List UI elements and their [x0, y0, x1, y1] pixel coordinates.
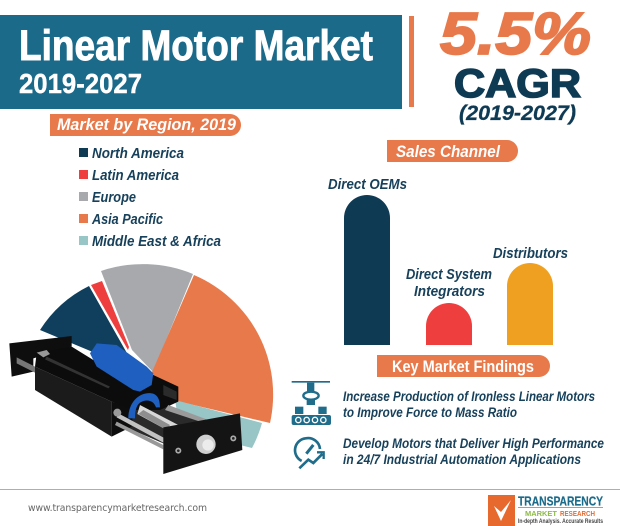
bar labels: Integrators: [414, 284, 485, 300]
logo: [488, 494, 604, 526]
bar: distributors: [507, 263, 553, 345]
legend: North America: [92, 145, 184, 162]
legend: Europe: [92, 189, 136, 206]
icon: performance gauge: [295, 438, 324, 468]
bar labels: Direct System: [406, 267, 492, 283]
title: Linear Motor Market: [19, 22, 373, 70]
icon: robotic arm and conveyor: [292, 381, 331, 425]
website url: www.transparencymarketresearch.com: [28, 503, 207, 514]
CAGR callout: (2019-2027): [459, 102, 576, 125]
logo: RESEARCH: [560, 509, 595, 518]
findings text: [343, 389, 604, 467]
bar: direct system integrators: [426, 303, 472, 345]
logo: In-depth Analysis. Accurate Results: [518, 519, 604, 525]
bar: direct OEMs: [344, 195, 390, 345]
CAGR callout: CAGR: [454, 62, 581, 106]
pie chart: [40, 264, 273, 448]
legend: Asia Pacific: [91, 211, 164, 228]
CAGR callout: 5.5%: [440, 1, 591, 67]
title banner: [0, 15, 402, 109]
findings text: in 24/7 Industrial Automation Applications: [343, 452, 581, 467]
CAGR callout: [440, 1, 591, 125]
linear motor product image: [9, 336, 242, 474]
legend: Latin America: [92, 167, 179, 184]
bar labels: Direct OEMs: [328, 177, 407, 193]
legend: [79, 145, 221, 250]
bar chart: sales channel: [344, 195, 553, 345]
findings text: to Improve Force to Mass Ratio: [343, 405, 517, 420]
accent bar: [409, 16, 414, 107]
heading: market by region: Market by Region, 2019: [57, 116, 237, 134]
legend: Middle East & Africa: [92, 233, 221, 250]
footer divider: [0, 489, 620, 490]
heading: sales channel: Sales Channel: [396, 143, 500, 161]
subtitle years: 2019-2027: [19, 68, 142, 99]
bar labels: Distributors: [493, 246, 568, 262]
logo: MARKET: [525, 509, 557, 518]
bar labels: [328, 177, 568, 300]
heading: key market findings: Key Market Findings: [392, 358, 534, 376]
